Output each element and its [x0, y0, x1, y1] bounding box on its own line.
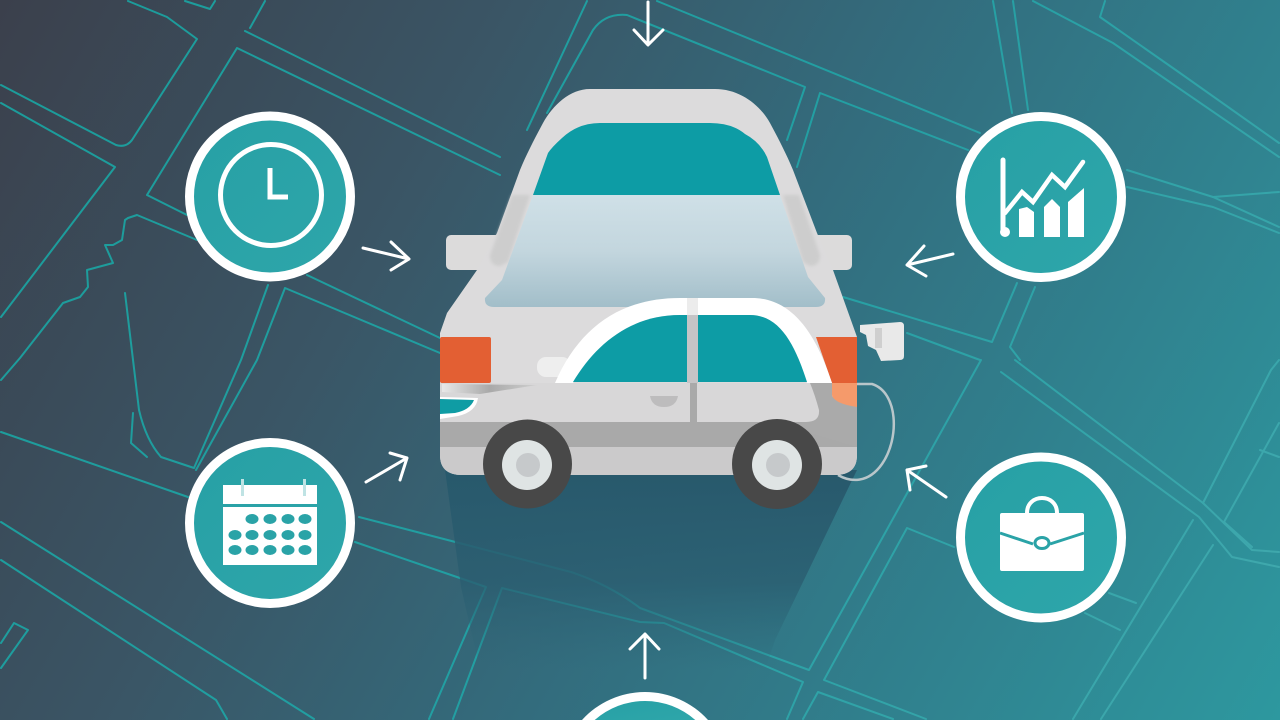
- icon: briefcase: [960, 457, 1122, 618]
- right tail light: [816, 337, 857, 383]
- windshield glass: [485, 195, 825, 307]
- rear side window: [698, 315, 807, 382]
- door pillar: [687, 315, 698, 383]
- roof arch: [555, 298, 832, 383]
- rear car body: [440, 89, 857, 475]
- tail light lower strip: [832, 383, 857, 407]
- arrow: lower right: [907, 466, 946, 497]
- roof pillar highlight: [687, 298, 698, 315]
- charging cable: [838, 384, 894, 480]
- arrow: lower left: [366, 453, 407, 482]
- side car body: [440, 383, 819, 422]
- arrow: upper left: [363, 242, 409, 270]
- headlight: [440, 397, 478, 419]
- left pillar shade: [490, 195, 530, 266]
- hood crease: [442, 384, 537, 394]
- arrow: top: [634, 2, 663, 45]
- plug: [860, 322, 904, 361]
- rear window: [533, 123, 780, 195]
- front side window: [573, 315, 687, 382]
- arrow: upper right: [907, 246, 953, 276]
- arrow: bottom: [630, 634, 659, 678]
- right pillar shade: [783, 195, 820, 266]
- car ground shadow: [445, 470, 857, 670]
- lower gray band: [440, 422, 857, 447]
- rear wheel: [732, 419, 822, 509]
- icon: calendar: [190, 442, 350, 604]
- rocker panel: [440, 447, 857, 475]
- side mirror: [537, 357, 571, 377]
- car illustration: [440, 89, 857, 509]
- left mirror: [446, 235, 502, 270]
- door divider: [690, 383, 697, 422]
- icon: growth chart: [960, 116, 1122, 278]
- door handle: [650, 396, 678, 407]
- icon: clock: [190, 116, 350, 277]
- left tail light: [440, 337, 491, 383]
- rear quarter shade: [800, 383, 857, 447]
- right mirror: [798, 235, 852, 270]
- front wheel: [483, 420, 572, 508]
- icon: bottom circle: [582, 692, 708, 720]
